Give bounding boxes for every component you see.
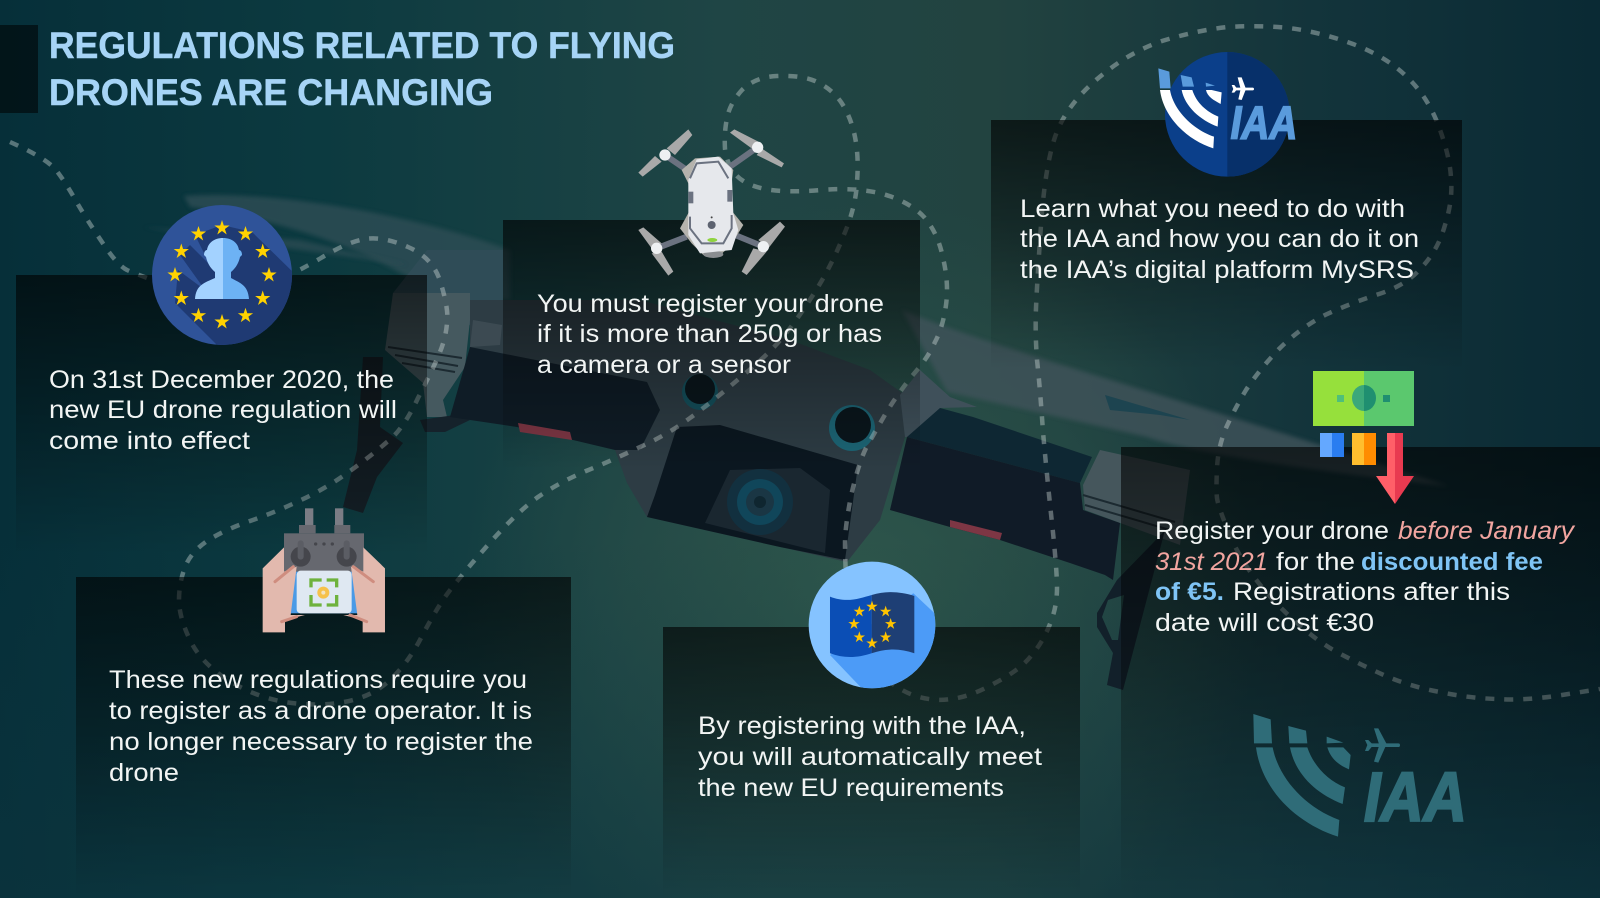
panel: operator registration	[76, 508, 571, 898]
text: fee details: date will cost €30	[1155, 609, 1374, 637]
text: fee details: discounted fee	[1361, 548, 1543, 576]
icon: hands holding remote	[263, 508, 385, 632]
icon: EU person badge	[152, 205, 296, 350]
icon: banknote and falling price bars	[1313, 371, 1414, 504]
panel: EU regulation date	[16, 205, 427, 555]
panel: drone registration threshold	[503, 129, 920, 470]
text: operator registration rule: drone	[109, 759, 179, 787]
text: learn what to do: the IAA and how you can do it on	[1020, 225, 1419, 253]
text: learn what to do	[1020, 195, 1419, 284]
panel: IAA platform	[991, 52, 1462, 370]
text: automatic compliance: you will automatically meet	[698, 743, 1042, 771]
logo: IAA watermark: IAA	[1364, 758, 1467, 836]
text: fee details: of €5.	[1155, 578, 1224, 606]
panel: EU requirements	[663, 562, 1080, 845]
title block: DRONES ARE CHANGING	[49, 72, 493, 113]
dashed flight path	[10, 26, 1600, 704]
title block	[0, 25, 675, 113]
icon: IAA round logo	[1158, 52, 1297, 177]
text: learn what to do: Learn what you need to do with	[1020, 195, 1405, 223]
icon: white drone	[638, 129, 785, 276]
text: when to register: You must register your drone	[537, 290, 884, 318]
logo: IAA watermark	[1253, 714, 1467, 837]
text: fee details: before January	[1398, 517, 1576, 545]
text: learn what to do: the IAA’s digital platform MySRS	[1020, 256, 1414, 284]
text: automatic compliance: By registering with the IAA,	[698, 712, 1026, 740]
text: operator registration rule: to register as a drone operator. It is	[109, 697, 532, 725]
text: fee details: Registrations after this	[1233, 578, 1510, 606]
text: operator registration rule: These new regulations require you	[109, 666, 527, 694]
text: fee details	[1155, 517, 1576, 637]
drone photograph	[143, 195, 1448, 690]
text: when to register	[537, 290, 884, 379]
text: regulation takes effect	[49, 366, 397, 455]
icon: IAA round logo: IAA	[1231, 96, 1297, 148]
text: fee details: 31st 2021	[1155, 548, 1268, 576]
text: regulation takes effect: On 31st December 2020, the	[49, 366, 394, 394]
icon: EU flag badge	[809, 562, 940, 690]
text: regulation takes effect: new EU drone regulation will	[49, 396, 397, 424]
text: when to register: if it is more than 250g or has	[537, 320, 882, 348]
text: regulation takes effect: come into effect	[49, 427, 250, 455]
text: operator registration rule: no longer necessary to register the	[109, 728, 533, 756]
text: operator registration rule	[109, 666, 533, 787]
text: when to register: a camera or a sensor	[537, 351, 791, 379]
text: automatic compliance	[698, 712, 1042, 802]
text: automatic compliance: the new EU requirements	[698, 774, 1004, 802]
text: fee details: Register your drone	[1155, 517, 1389, 545]
text: fee details: for the	[1276, 548, 1355, 576]
title block: REGULATIONS RELATED TO FLYING	[49, 25, 675, 66]
panel: registration fee	[1121, 371, 1600, 898]
